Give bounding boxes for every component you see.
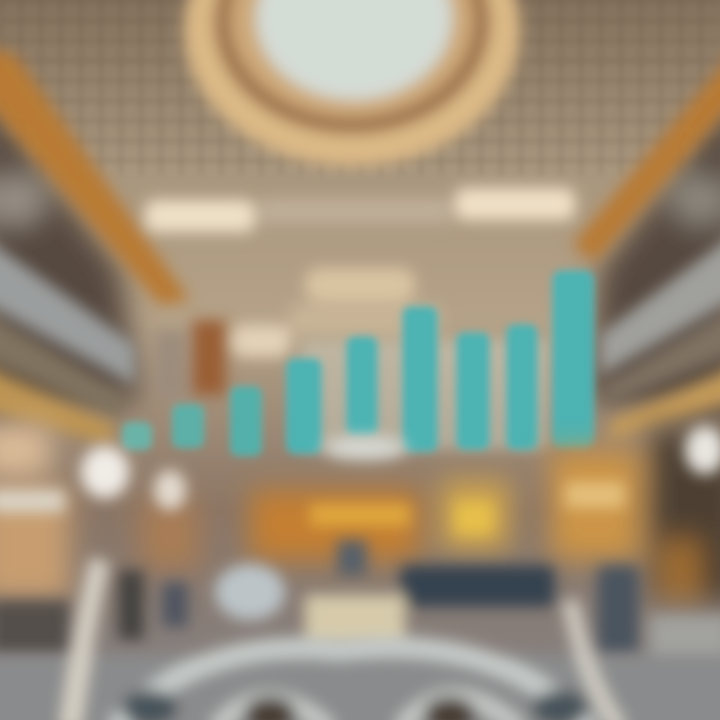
side dark walls	[0, 90, 720, 420]
central columns	[155, 320, 226, 400]
bright lamps	[0, 426, 720, 534]
lower hall warm shops	[0, 425, 720, 600]
wooden ceiling beams	[0, 45, 720, 305]
dome ring	[184, 0, 520, 166]
lower floor and crowd	[0, 540, 720, 665]
ceiling light panels	[145, 188, 575, 357]
pale haze behind bars	[300, 340, 550, 450]
bottom white arches	[0, 560, 720, 720]
ceiling coffer grid	[0, 0, 720, 175]
teal bar chart	[122, 270, 594, 456]
left and right grey balconies	[0, 230, 720, 445]
